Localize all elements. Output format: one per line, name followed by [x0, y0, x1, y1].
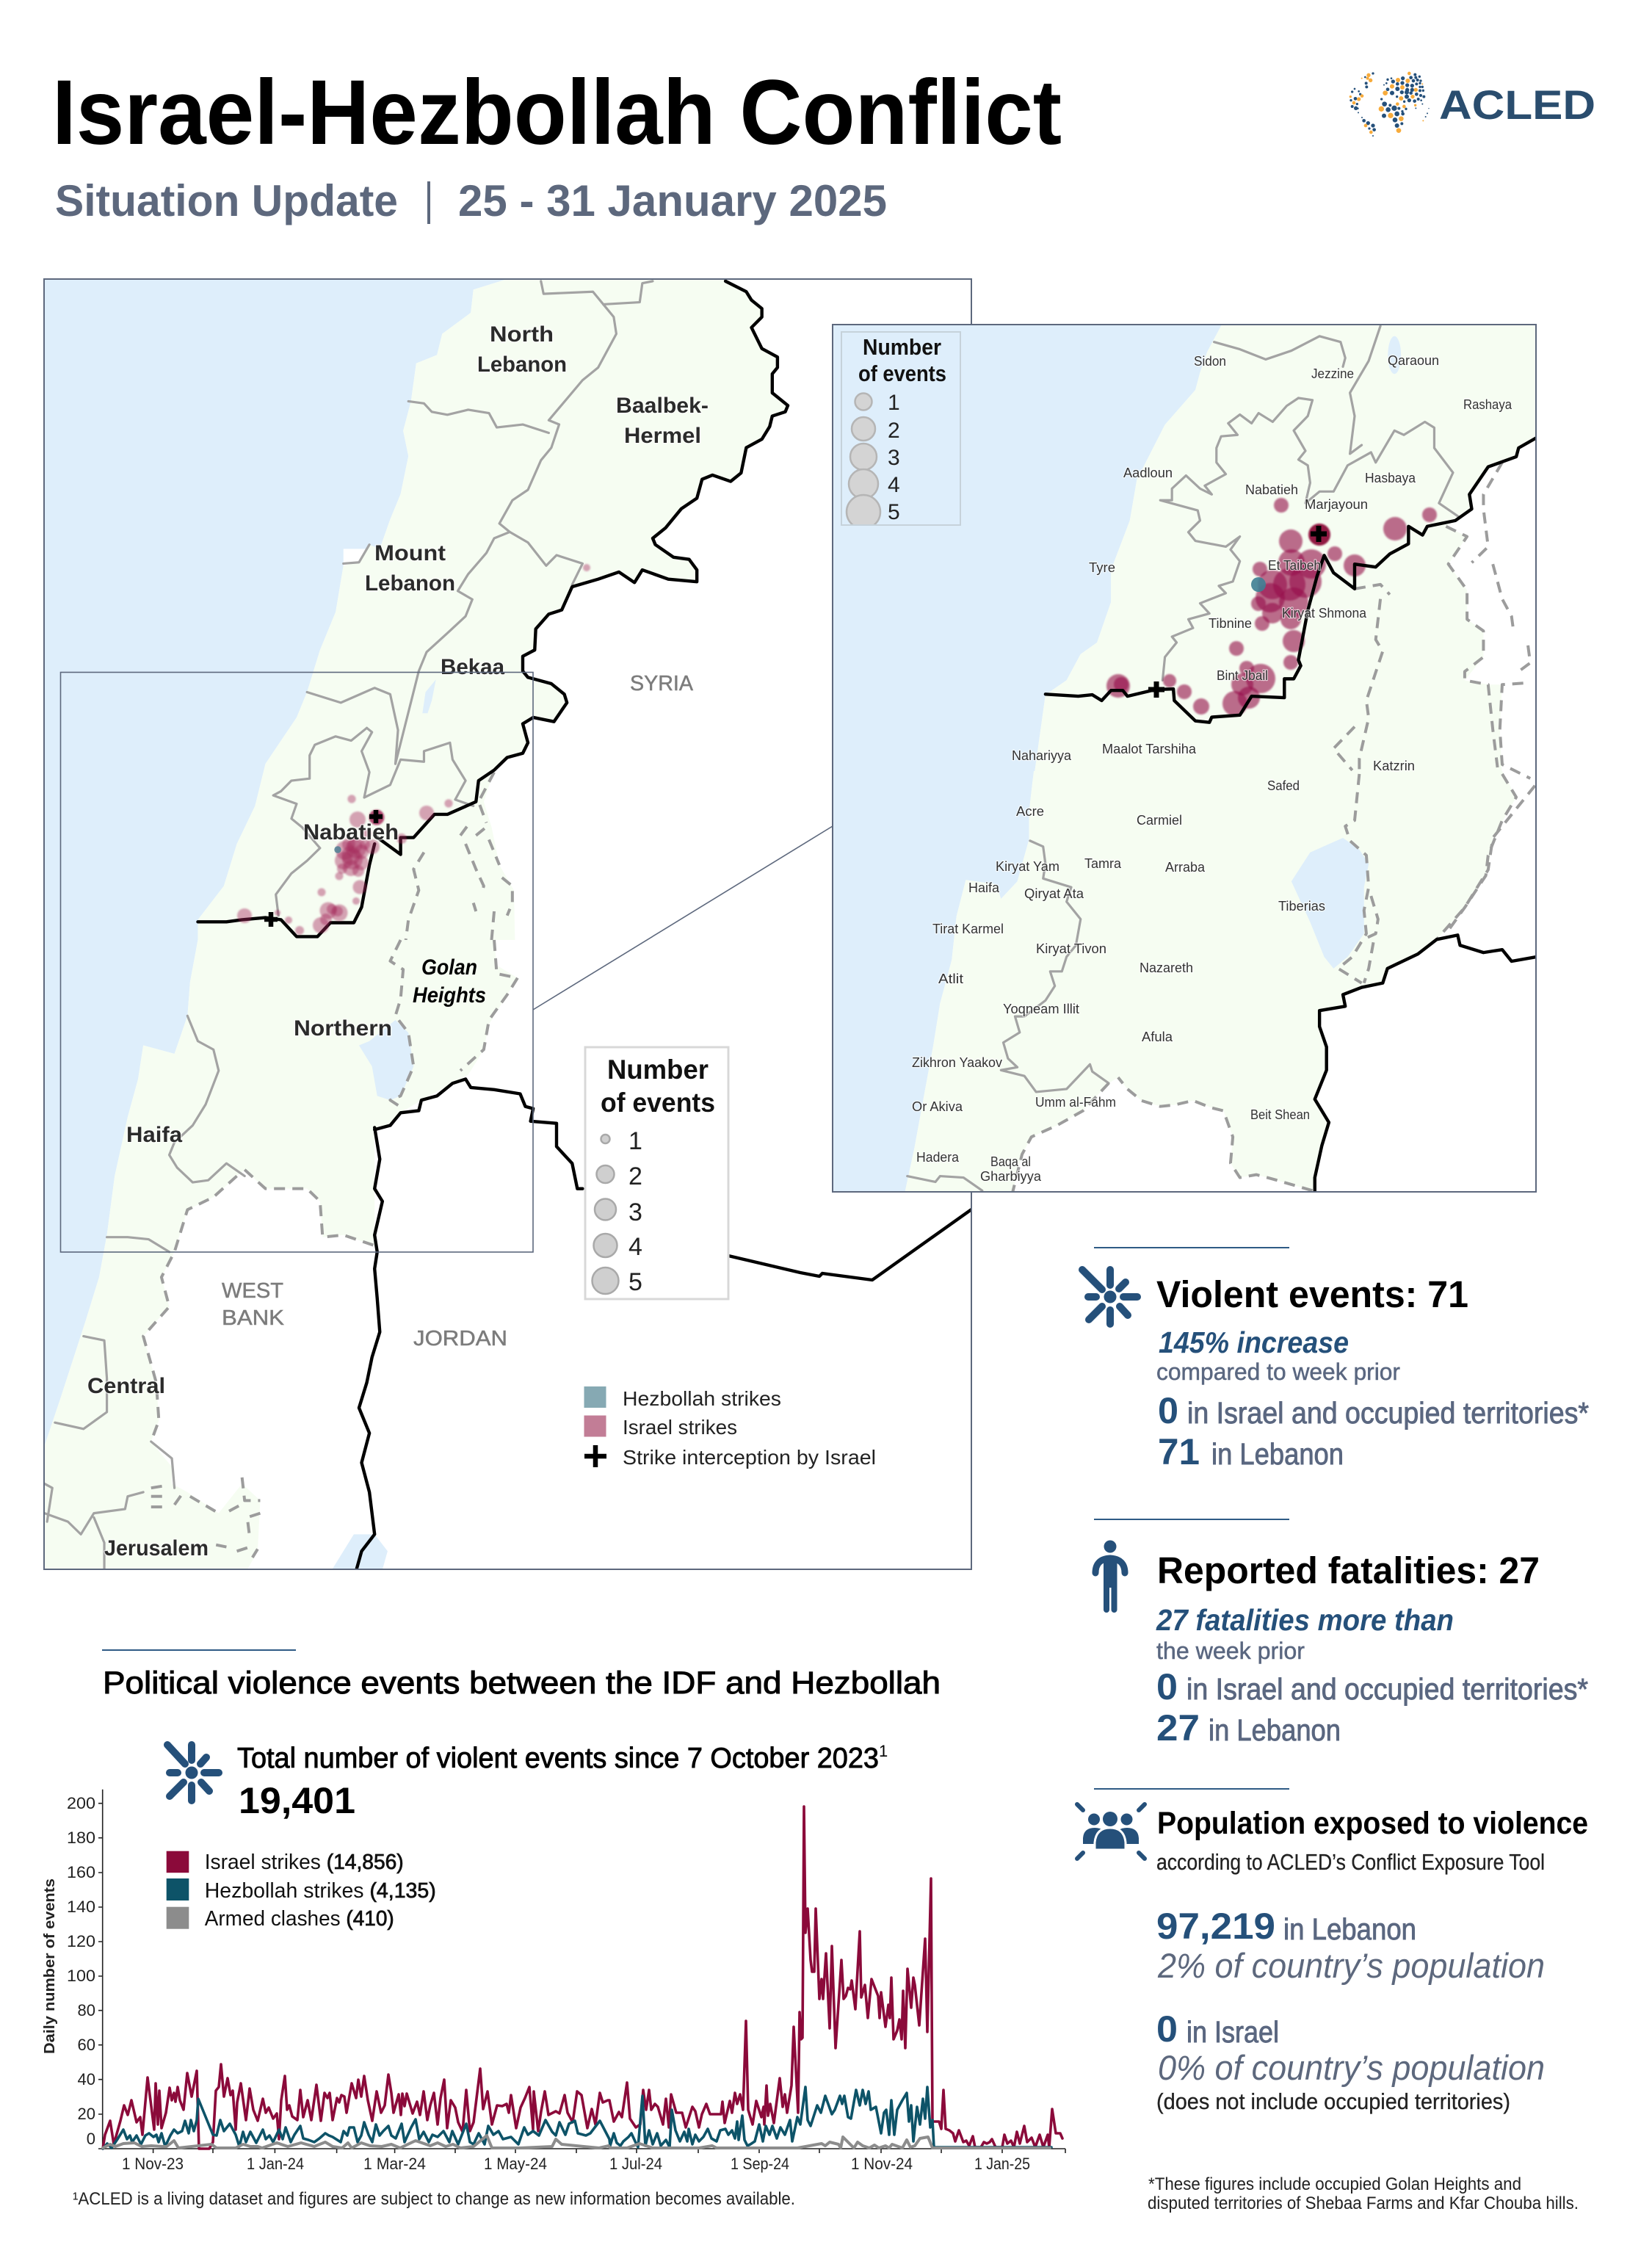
chart legend	[167, 1851, 436, 1931]
inset town labels: Kiryat Tivon	[1036, 941, 1106, 956]
inset town labels: Kiryat Yam	[996, 859, 1059, 874]
inset town labels	[912, 353, 1512, 1184]
x axis labels: 1 Mar-24	[363, 2155, 426, 2173]
panel: reported fatalities: in Lebanon	[1209, 1713, 1341, 1747]
map north section geography	[37, 279, 788, 940]
footnote: occupied territories	[1148, 2174, 1579, 2213]
legend: number of events (main map): 2	[628, 1162, 642, 1190]
legend: number of events (inset): 3	[888, 446, 900, 470]
icon: person	[1095, 1541, 1125, 1613]
inset town labels: Tyre	[1089, 560, 1115, 575]
inset town labels: Afula	[1142, 1030, 1173, 1044]
panel: population exposed	[1077, 1788, 1588, 2114]
inset town labels: Katzrin	[1373, 759, 1415, 773]
inset town labels: Atlit	[938, 972, 963, 986]
map labels: Heights	[413, 983, 486, 1008]
panel: population exposed: 0	[1156, 2008, 1178, 2050]
map labels: Mount	[374, 541, 446, 565]
y axis labels: 140	[67, 1898, 95, 1916]
footnote: living dataset: ¹ACLED is a living dataset and figures are subject to change as new information becomes available.	[73, 2189, 795, 2209]
y axis labels: 180	[67, 1829, 95, 1847]
section heading: political violence: Political violence events between the IDF and Hezbollah	[103, 1666, 941, 1701]
legend: number of events (inset): 4	[888, 473, 900, 497]
panel: population exposed: 2% of country’s population	[1157, 1946, 1545, 1985]
line chart: daily events	[42, 1790, 1065, 2173]
legend: number of events (inset): 5	[888, 500, 900, 524]
inset town labels: Sidon	[1194, 354, 1226, 369]
map labels: Baalbek-	[616, 394, 709, 418]
bubbles: strikes on inset map	[1106, 498, 1437, 716]
logo: ACLED	[1350, 72, 1595, 137]
inset town labels: Beit Shean	[1250, 1107, 1310, 1122]
inset town labels: Arraba	[1165, 860, 1206, 875]
country labels: JORDAN	[413, 1327, 507, 1350]
y axis labels: 120	[67, 1932, 95, 1950]
legend: number of events (inset): 1	[888, 391, 900, 415]
inset town labels: Yoqneam Illit	[1003, 1002, 1079, 1016]
country labels: SYRIA	[630, 672, 694, 695]
subtitle: Situation Update	[55, 176, 398, 225]
x axis labels: 1 May-24	[484, 2155, 547, 2173]
footnote: occupied territories: *These figures include occupied Golan Heights and	[1148, 2174, 1521, 2194]
inset border lines	[1046, 438, 1537, 723]
map labels: Lebanon	[365, 571, 455, 596]
series: Israel strikes	[103, 1807, 1062, 2149]
panel: reported fatalities: the week prior	[1156, 1638, 1305, 1664]
inset town labels: Gharbiyya	[980, 1169, 1042, 1184]
panel: reported fatalities: 27	[1156, 1707, 1200, 1748]
panel: population exposed: Population exposed to violence	[1157, 1806, 1588, 1841]
legend: number of events (main map): 3	[628, 1198, 642, 1226]
inset town labels: Tamra	[1084, 856, 1122, 871]
inset town labels: Haifa	[968, 880, 1000, 895]
x axis labels: 1 Jan-24	[247, 2155, 304, 2173]
chart axes	[98, 1790, 1065, 2153]
inset town labels: Carmiel	[1137, 813, 1182, 828]
map labels: Lebanon	[477, 352, 567, 377]
y axis labels: 0	[87, 2130, 95, 2148]
country labels: WEST	[222, 1279, 283, 1303]
legend: number of events (main map)	[585, 1047, 728, 1299]
map labels	[87, 322, 709, 1560]
inset town labels: Acre	[1016, 804, 1044, 819]
icon: violence burst small	[167, 1745, 219, 1801]
map labels: Jerusalem	[104, 1536, 209, 1560]
inset north geography	[827, 323, 1540, 778]
series: Armed clashes	[103, 2135, 1050, 2148]
subtitle: 25 - 31 January 2025	[458, 176, 887, 225]
panel: inset map of southern Lebanon and northern Israel	[827, 323, 1540, 1192]
panel: reported fatalities: 0	[1156, 1666, 1178, 1707]
inset town labels: Jezzine	[1311, 366, 1354, 381]
panel: population exposed: in Israel	[1187, 2015, 1279, 2049]
inset town labels: Baqa al	[990, 1154, 1031, 1169]
legend: number of events (inset): 2	[888, 419, 900, 443]
icon: violence burst	[1082, 1270, 1137, 1324]
y axis title: Daily number of events	[42, 1878, 58, 2054]
inset town labels: Tirat Karmel	[932, 922, 1004, 936]
inset town labels: Nazareth	[1140, 961, 1193, 975]
chart legend: Israel strikes (14,856)	[205, 1851, 404, 1874]
total events callout	[167, 1742, 888, 1821]
x axis labels: 1 Jan-25	[974, 2155, 1030, 2173]
country labels: BANK	[222, 1306, 285, 1330]
inset town labels: Hasbaya	[1365, 471, 1416, 485]
inset town labels: Qaraoun	[1388, 353, 1439, 368]
inset town labels: Safed	[1267, 778, 1300, 793]
panel: population exposed: (does not include occupied territories)	[1156, 2088, 1510, 2114]
inset town labels: Tiberias	[1278, 899, 1325, 914]
icon: group of people	[1077, 1804, 1145, 1859]
legend: number of events (main map): Number	[607, 1055, 709, 1085]
footnote: occupied territories: disputed territories of Shebaa Farms and Kfar Chouba hills.	[1148, 2194, 1579, 2213]
legend: number of events (main map): 5	[628, 1268, 642, 1296]
panel: violent events: compared to week prior	[1156, 1359, 1400, 1385]
panel: population exposed: in Lebanon	[1283, 1912, 1416, 1946]
country labels	[222, 672, 694, 1350]
locator rectangle and connector	[60, 673, 833, 1252]
y axis labels: 40	[78, 2070, 95, 2088]
map labels: Central	[87, 1374, 165, 1398]
map labels: Bekaa	[441, 655, 504, 679]
chart legend: Armed clashes (410)	[205, 1907, 394, 1931]
logo: ACLED: ACLED	[1439, 82, 1595, 128]
total events callout: 19,401	[239, 1780, 355, 1821]
legend: number of events (inset): Number	[863, 334, 941, 360]
x axis labels: 1 Jul-24	[609, 2155, 662, 2173]
chart legend: Hezbollah strikes (4,135)	[205, 1879, 436, 1903]
y axis labels: 160	[67, 1863, 95, 1881]
legend: strike types: Hezbollah strikes	[623, 1387, 781, 1410]
inset town labels: Bint Jbail	[1217, 668, 1268, 683]
inset town labels: Zikhron Yaakov	[912, 1055, 1002, 1070]
inset town labels: Rashaya	[1463, 397, 1512, 412]
panel: violent events: in Lebanon	[1211, 1437, 1344, 1471]
inset town labels: Marjayoun	[1305, 497, 1368, 512]
inset town labels: Kiryat Shmona	[1282, 606, 1367, 621]
map labels: Northern	[294, 1016, 392, 1041]
inset town labels: Et Taibeh	[1268, 558, 1321, 573]
inset town labels: Tibnine	[1209, 616, 1252, 631]
x axis labels: 1 Nov-24	[851, 2155, 913, 2173]
y axis labels: 80	[78, 2001, 95, 2019]
y axis labels: 200	[67, 1794, 95, 1812]
inset town labels: Qiryat Ata	[1024, 886, 1084, 901]
title: Israel-Hezbollah Conflict	[52, 62, 1062, 164]
panel: population exposed: according to ACLED’s Conflict Exposure Tool	[1156, 1849, 1545, 1875]
inset town labels: Aadloun	[1123, 466, 1173, 480]
map labels: Hermel	[624, 424, 701, 448]
y axis labels: 20	[78, 2105, 95, 2123]
panel: population exposed: 97,219	[1156, 1906, 1275, 1947]
map labels: Golan	[421, 955, 477, 980]
subtitle	[55, 176, 887, 225]
total events callout: Total number of violent events since 7 October 2023	[237, 1743, 879, 1774]
inset town labels: Nabatieh	[1245, 482, 1298, 497]
legend: number of events (main map): of events	[601, 1088, 715, 1118]
panel: violent events	[1082, 1247, 1589, 1472]
inset town labels: Or Akiva	[912, 1099, 963, 1114]
inset south geography	[827, 771, 1537, 1192]
legend: strike types	[584, 1386, 876, 1469]
panel: main regional map	[37, 279, 971, 1570]
legend: strike types: Israel strikes	[623, 1416, 737, 1439]
legend: strike types: Strike interception by Israel	[623, 1446, 876, 1469]
panel: violent events: 0	[1158, 1390, 1178, 1431]
total events callout: 1	[879, 1742, 888, 1760]
y axis labels: 60	[78, 2036, 95, 2054]
panel: reported fatalities: in Israel and occupied territories*	[1187, 1672, 1588, 1706]
bubbles: strikes on main map	[237, 564, 590, 935]
legend: number of events (inset)	[841, 332, 960, 529]
x axis labels	[122, 2155, 1030, 2173]
map south section geography	[37, 940, 582, 1570]
map labels: Nabatieh	[303, 820, 399, 845]
inset town labels: Umm al-Fahm	[1035, 1095, 1116, 1110]
legend: number of events (main map): 4	[628, 1233, 642, 1261]
x axis labels: 1 Sep-24	[731, 2155, 789, 2173]
y axis labels: 100	[67, 1967, 95, 1985]
map labels: Haifa	[126, 1123, 182, 1147]
panel: violent events: in Israel and occupied territories*	[1187, 1396, 1589, 1430]
panel: reported fatalities: Reported fatalities: 27	[1157, 1549, 1540, 1591]
panel: reported fatalities: 27 fatalities more than	[1156, 1603, 1454, 1637]
legend: number of events (main map): 1	[628, 1127, 642, 1155]
panel: population exposed: 0% of country’s population	[1158, 2048, 1545, 2087]
panel: violent events: 71	[1158, 1431, 1200, 1472]
series: Hezbollah strikes	[103, 2087, 1051, 2149]
y axis labels	[67, 1794, 95, 2148]
panel: reported fatalities	[1094, 1519, 1588, 1748]
inset town labels: Nahariyya	[1012, 748, 1072, 763]
inset town labels: Maalot Tarshiha	[1102, 742, 1197, 756]
x axis labels: 1 Nov-23	[122, 2155, 184, 2173]
map labels: North	[490, 322, 554, 347]
panel: violent events: Violent events: 71	[1156, 1273, 1468, 1315]
panel: violent events: 145% increase	[1159, 1326, 1349, 1359]
inset town labels: Hadera	[916, 1150, 960, 1165]
legend: number of events (inset): of events	[858, 361, 946, 386]
